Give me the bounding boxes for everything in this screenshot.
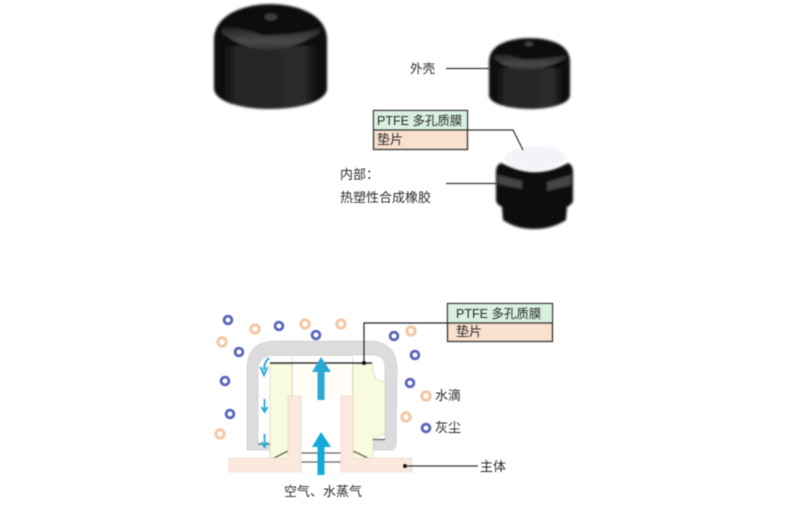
arrow: small flow 2 [262, 434, 268, 447]
legend: dust: 灰尘 [435, 420, 461, 435]
label: main body [403, 459, 506, 474]
callout: PTFE and gasket labels, bottom: 垫片 [456, 324, 482, 339]
arrow: small downward flow 1 [262, 399, 268, 412]
label: air and water vapour: 空气、水蒸气 [284, 484, 362, 499]
cross-section: PTFE membrane line [270, 362, 372, 364]
cross-section: inner top frame [270, 356, 352, 396]
cross-section: interior white [294, 364, 351, 396]
arrow: upper air flow [312, 357, 331, 400]
legend: water droplet: 水滴 [435, 388, 461, 403]
inner body photo with gasket [496, 146, 573, 229]
cross-section: main body stems and flange [229, 396, 412, 472]
label: main body: 主体 [480, 459, 506, 474]
callout: PTFE and gasket labels, bottom [362, 304, 553, 365]
small black cap: outer shell [489, 38, 570, 109]
cross-section diagram [229, 341, 412, 475]
callout: PTFE and gasket labels, top: PTFE 多孔质膜 [377, 114, 462, 128]
label: inner body material: 热塑性合成橡胶 [340, 190, 431, 205]
callout: PTFE and gasket labels, top [373, 110, 523, 150]
cross-section: inner grey lines [258, 440, 385, 462]
label: outer shell: 外壳 [410, 62, 435, 76]
label: outer shell [410, 62, 489, 76]
callout: PTFE and gasket labels, bottom: PTFE 多孔质膜 [456, 307, 541, 321]
large black cap photo [214, 4, 327, 109]
cross-section: gasket body [270, 364, 385, 460]
arrow: deflected water [260, 358, 269, 375]
callout: PTFE and gasket labels, top: 垫片 [377, 132, 403, 147]
cross-section: outer shell [247, 341, 397, 450]
label: inner body material: 内部： [340, 167, 379, 182]
label: inner body material [340, 167, 497, 205]
arrow: lower air flow [312, 432, 331, 475]
water and dust particles [216, 316, 430, 438]
